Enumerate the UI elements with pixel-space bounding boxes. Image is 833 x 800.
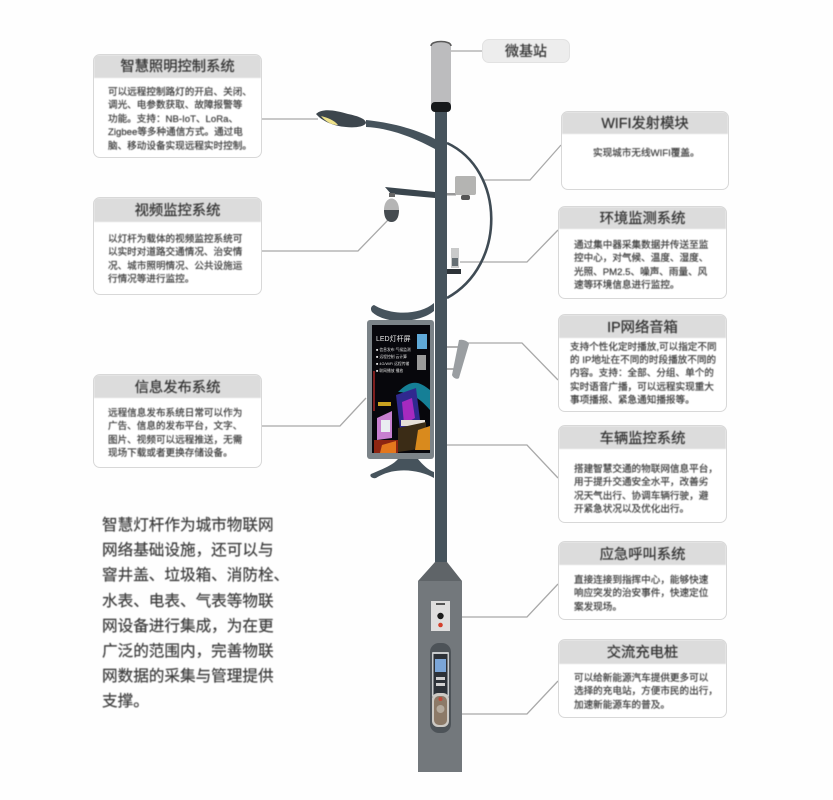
text block [574, 238, 709, 291]
text block: 选择的充电站，方便市民的出行， [574, 686, 718, 697]
heading: IP网络音箱 [607, 320, 678, 336]
text block: 控中心，对气候、温度、湿度、 [574, 253, 708, 264]
LED display: ■ 远程控制 云计算 [376, 354, 407, 359]
heading [559, 542, 726, 565]
text block: Zigbee等多种通信方式。通过电 [108, 127, 243, 138]
LED display: ■ 联网播放 播放 [376, 368, 403, 373]
LED display: ■ 信息发布 气候监测 [376, 347, 411, 352]
heading [94, 198, 261, 222]
text block: 直接连接到指挥中心，能够快速 [574, 575, 708, 586]
text block: 用于提升交通安全水平，改善劣 [574, 477, 708, 488]
text block: 速等环境信息进行监控。 [574, 280, 680, 291]
heading: 交流充电桩 [607, 645, 678, 661]
text block [574, 672, 718, 711]
text block: 响应突发的治安事件，快速定位 [574, 588, 708, 599]
label: micro base station [482, 39, 570, 63]
heading: 智慧照明控制系统 [120, 59, 235, 75]
text block [108, 406, 242, 459]
panel: information publishing [93, 374, 262, 468]
text block: smart pole summary: 智慧灯杆作为城市物联网 [102, 517, 274, 534]
panel: vehicle monitoring [558, 425, 727, 523]
panel: IP speaker [558, 314, 727, 412]
street lamp head [316, 110, 366, 127]
dome camera [384, 193, 399, 222]
text block: 远程信息发布系统日常可以作为 [108, 408, 242, 419]
heading [94, 375, 261, 398]
IP speaker [447, 340, 469, 379]
text block: 功能。支持：NB-IoT、LoRa、 [108, 114, 238, 125]
panel: WIFI module [561, 111, 729, 190]
text block: 内容。支持：全部、分组、单个的 [570, 368, 714, 379]
text block: 事项播报、紧急通知播报等。 [570, 395, 695, 406]
text block: 可以远程控制路灯的开启、关闭、 [108, 87, 252, 98]
text block: smart pole summary: 窨井盖、垃圾箱、消防栓、 [102, 567, 289, 584]
text block: 通过集中器采集数据并传送至监 [574, 240, 708, 251]
environment sensor [447, 248, 461, 274]
panel: video surveillance [93, 197, 262, 295]
LED display: LED灯杆屏 [376, 334, 411, 343]
text block: 广告、信息的发布平台，文字、 [108, 421, 242, 432]
text block: 实现城市无线WIFI覆盖。 [593, 148, 700, 159]
heading: 视频监控系统 [135, 203, 220, 219]
heading [559, 207, 726, 229]
text block: 开紧急状况以及优化出行。 [574, 504, 689, 515]
text block: 加速新能源车的普及。 [574, 700, 670, 711]
text block: 脑、移动设备实现远程实时控制。 [108, 141, 252, 152]
text block: 可以给新能源汽车提供更多可以 [574, 673, 708, 684]
text block [108, 86, 252, 152]
heading [559, 640, 726, 664]
text block: smart pole summary: 水表、电表、气表等物联 [102, 593, 274, 610]
text block: 以灯杆为载体的视频监控系统可 [108, 234, 242, 245]
heading [94, 55, 261, 78]
text block: smart pole summary: 广泛的范围内，完善物联 [102, 643, 274, 660]
heading: 信息发布系统 [135, 380, 220, 396]
text block: 实时语音广播，可以远程实现重大 [570, 382, 714, 393]
text block: smart pole summary [102, 516, 289, 710]
upper crescent bracket [371, 303, 434, 321]
text block: 况天气出行、协调车辆行驶，避 [574, 491, 708, 502]
emergency call panel [431, 601, 450, 631]
text block [108, 232, 243, 285]
micro base station [431, 42, 451, 112]
text block [574, 574, 708, 613]
text block: 支持个性化定时播放,可以指定不同 [570, 342, 717, 353]
text block [570, 340, 717, 406]
leader lines [262, 51, 561, 714]
text block: smart pole summary: 网络基础设施，还可以与 [102, 542, 274, 559]
text block: smart pole summary: 网数据的采集与管理提供 [102, 668, 274, 685]
text block: 案发现场。 [574, 602, 622, 613]
text block: 现场下载或者更换存储设备。 [108, 448, 233, 459]
text block: 光照、PM2.5、噪声、雨量、风 [574, 267, 707, 278]
panel: AC charging pile [558, 639, 727, 718]
pole base [418, 562, 462, 772]
thin curved arc [447, 143, 491, 298]
heading: 车辆监控系统 [600, 431, 685, 447]
heading: WIFI发射模块 [601, 116, 689, 132]
text block: 行情况等进行监控。 [108, 274, 194, 285]
LED display [367, 320, 434, 459]
panel: emergency call [558, 541, 727, 620]
WIFI module [447, 176, 476, 200]
text block: 调光、电参数获取、故障报警等 [108, 100, 242, 111]
text block: 搭建智慧交通的物联网信息平台， [574, 464, 718, 475]
text block: 以实时对道路交通情况、治安情 [108, 247, 242, 258]
text block: smart pole summary: 支撑。 [102, 693, 149, 710]
panel: smart lighting control [93, 54, 262, 158]
text block: 的 IP地址在不同的时段播放不同的 [570, 355, 716, 366]
text block: smart pole summary: 网设备进行集成，为在更 [102, 618, 274, 635]
heading [562, 112, 728, 134]
text block: 图片、视频可以远程推送，无需 [108, 435, 242, 446]
LED display: ■ 4G/WiFi 远程传输 [376, 361, 410, 366]
heading [559, 426, 726, 449]
lower crescent bracket [370, 459, 434, 478]
heading: 环境监测系统 [600, 211, 685, 227]
charging pile [430, 643, 451, 733]
camera arm [385, 187, 435, 198]
lamp arm [366, 120, 435, 149]
panel: environment monitoring [558, 206, 727, 299]
heading: 应急呼叫系统 [600, 547, 685, 563]
text block [574, 462, 718, 515]
text block: 况、城市照明情况、公共设施运 [108, 261, 242, 272]
heading [559, 315, 726, 338]
label: micro base station: 微基站 [505, 43, 547, 59]
pole shaft [435, 108, 447, 564]
